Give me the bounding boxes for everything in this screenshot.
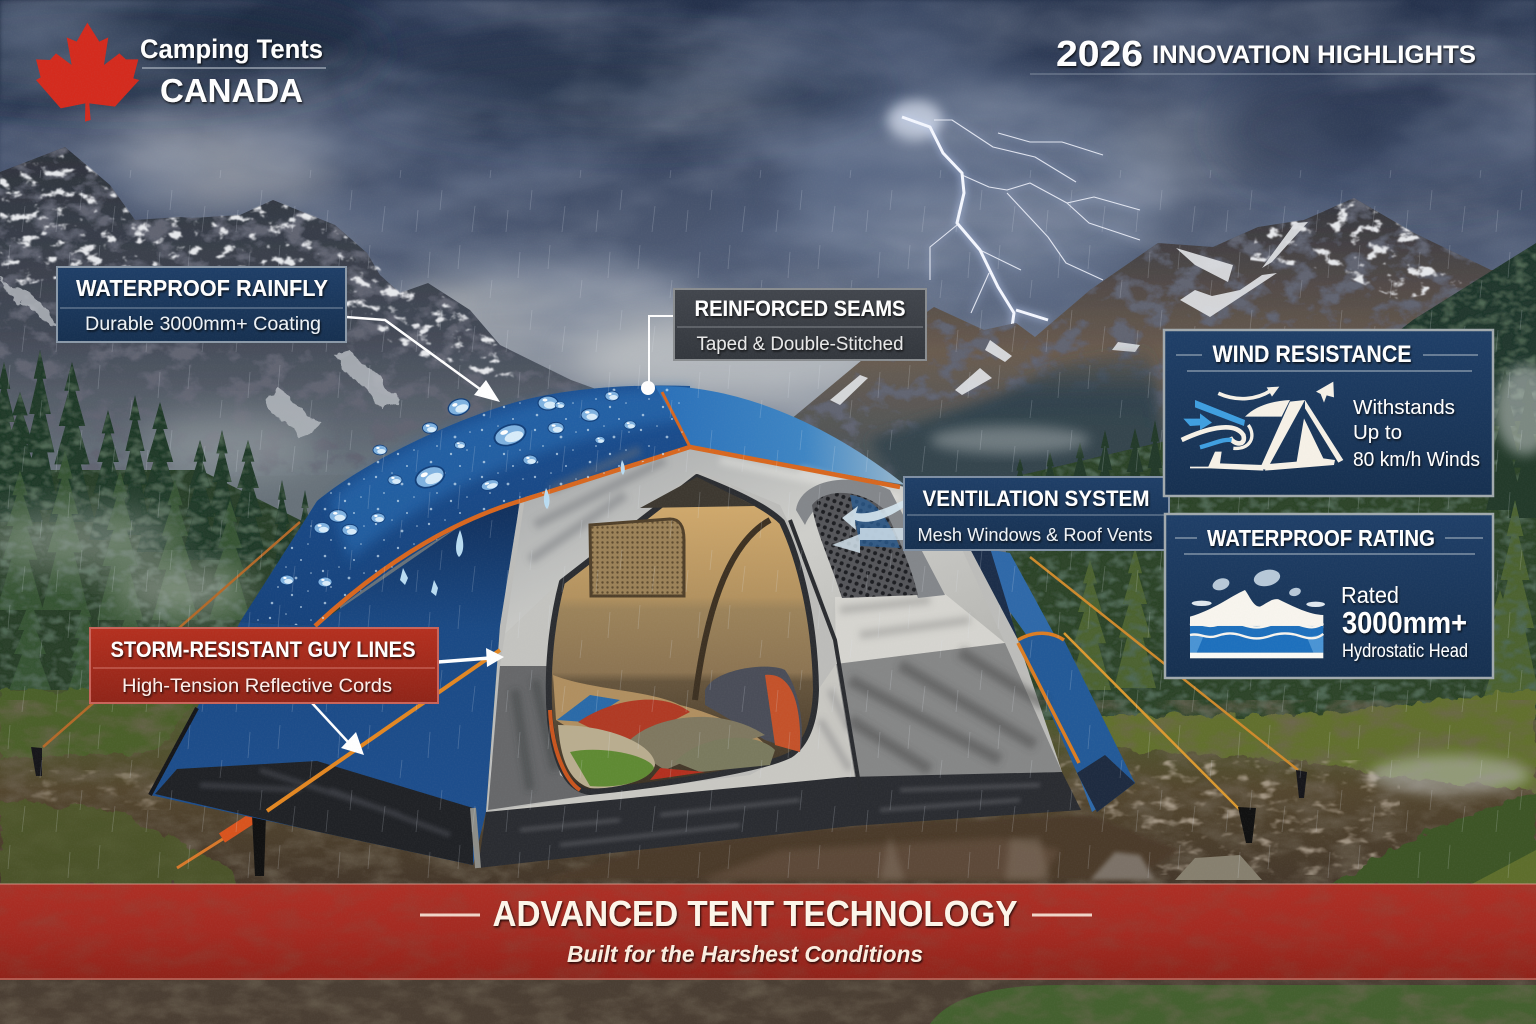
right hillside — [1400, 243, 1536, 440]
misty backdrop below mountains — [0, 425, 1536, 655]
heading: ventilation system: VENTILATION SYSTEM — [922, 486, 1150, 511]
country name: CANADA — [160, 72, 303, 109]
panel: storm-resistant guy lines — [90, 628, 438, 703]
front guy line — [267, 650, 500, 811]
panel: ventilation system — [904, 477, 1169, 550]
banner: advanced tent technology — [0, 884, 1536, 980]
logo: camping tents canada — [36, 23, 326, 122]
light band under window — [835, 594, 1005, 664]
left forest — [0, 350, 340, 695]
lower right panel — [836, 643, 1062, 778]
floor sill — [490, 664, 855, 812]
text: rating value: Hydrostatic Head — [1342, 641, 1468, 662]
door interior — [549, 477, 816, 792]
callout: reinforced seams — [641, 289, 926, 395]
right forest — [930, 365, 1536, 720]
panel: waterproof rating — [1165, 514, 1493, 678]
upper fabric flap — [505, 447, 1005, 665]
heading: waterproof rainfly: WATERPROOF RAINFLY — [76, 275, 328, 301]
mud, grass and puddle foreground — [0, 690, 1536, 885]
arrow: to tent — [438, 648, 504, 667]
rainfly upper canopy — [240, 386, 690, 626]
heading: wind resistance: WIND RESISTANCE — [1212, 341, 1412, 368]
panel: wind resistance — [1164, 330, 1493, 496]
orange seams — [315, 447, 900, 626]
banner subtitle: Built for the Harshest Conditions — [567, 941, 923, 967]
dark skirt left — [155, 761, 473, 865]
water droplets on rainfly — [240, 384, 700, 629]
side panel left of door — [500, 582, 560, 666]
icon: maple leaf — [36, 23, 139, 122]
rainfly right strip — [962, 545, 1135, 812]
dark skirt front — [478, 772, 1081, 868]
sleeping bags — [553, 675, 775, 788]
leader line: seams — [641, 316, 674, 395]
lower side panel left of door — [488, 666, 590, 810]
dark forest slope under right mountain — [870, 345, 1170, 490]
right mountains — [790, 198, 1536, 480]
ground — [0, 640, 1536, 890]
rainfly top right — [655, 386, 905, 485]
icon: wind over tent — [1182, 382, 1343, 471]
lightning bolt — [902, 117, 1140, 327]
stormy sky — [0, 0, 1536, 430]
text: rating value — [1341, 582, 1468, 662]
interior mesh panel — [590, 519, 684, 596]
window trim — [796, 480, 945, 598]
title: 2026 innovation highlights: 2026 — [1056, 33, 1143, 74]
callout: storm-resistant guy lines — [90, 628, 504, 755]
heading: waterproof rating: WATERPROOF RATING — [1207, 525, 1435, 551]
text: withstands: Withstands — [1353, 397, 1455, 419]
subtext: mesh windows: Mesh Windows & Roof Vents — [918, 524, 1152, 545]
mesh window — [812, 493, 918, 598]
tent — [150, 384, 1135, 868]
subtext: taped: Taped & Double-Stitched — [696, 334, 904, 355]
panel: reinforced seams — [674, 289, 926, 360]
text: withstands: Up to — [1353, 422, 1402, 444]
door top shade — [640, 477, 755, 508]
leader arrow: rainfly — [346, 317, 500, 402]
rainfly left body — [150, 501, 520, 865]
airflow arrows — [832, 500, 904, 553]
heading: reinforced seams: REINFORCED SEAMS — [694, 296, 906, 321]
fabric wrinkles — [515, 450, 1045, 790]
heading: storm-resistant guy lines: STORM-RESISTANT GUY LINES — [110, 637, 416, 662]
door orange trim — [550, 710, 580, 790]
front fabric base — [486, 447, 1062, 812]
ground strip below banner — [0, 978, 1536, 1024]
text: rating value: Rated — [1341, 582, 1399, 608]
arrow: to guy line — [312, 703, 364, 755]
panel: waterproof rainfly — [57, 267, 346, 342]
title: 2026 innovation highlights: INNOVATION HIGHLIGHTS — [1152, 41, 1476, 69]
guy lines and stakes — [31, 522, 1307, 876]
icon: water repelled — [1190, 567, 1325, 658]
brand name: Camping Tents — [140, 34, 323, 64]
text: rating value: 3000mm+ — [1342, 605, 1467, 640]
rain overlay — [0, 170, 1536, 880]
tent poles — [790, 520, 860, 790]
callout: waterproof rainfly — [57, 267, 500, 402]
backpack — [705, 667, 802, 752]
interior pole — [695, 520, 770, 700]
subtext: coating: Durable 3000mm+ Coating — [85, 314, 321, 335]
left mountains — [0, 147, 640, 480]
subtext: cords: High-Tension Reflective Cords — [122, 676, 392, 697]
text: withstands: 80 km/h Winds — [1353, 449, 1480, 471]
text: withstands — [1353, 397, 1480, 471]
callout: ventilation system — [832, 477, 1169, 553]
title: 2026 innovation highlights — [1030, 33, 1536, 74]
banner title: ADVANCED TENT TECHNOLOGY — [492, 893, 1018, 934]
